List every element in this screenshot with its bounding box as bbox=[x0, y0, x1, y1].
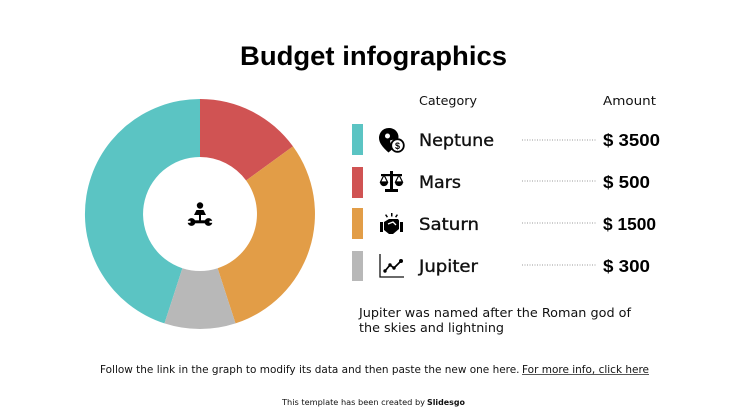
icon: person with wrench bbox=[187, 202, 213, 226]
label: Saturn: Saturn bbox=[419, 215, 479, 234]
swatch: Neptune bbox=[352, 124, 363, 155]
segment: Saturn bbox=[218, 146, 315, 323]
donut chart bbox=[85, 99, 315, 329]
icon: location pin with coin: $ bbox=[395, 141, 400, 151]
segment: Mars bbox=[200, 99, 293, 180]
leader line bbox=[522, 139, 596, 141]
note text: the skies and lightning bbox=[359, 320, 504, 335]
amount: Saturn: $ 1500 bbox=[603, 214, 656, 234]
label: Mars: Mars bbox=[419, 173, 461, 192]
row: Jupiter bbox=[352, 251, 650, 281]
label: Neptune: Neptune bbox=[419, 131, 494, 150]
note text: Jupiter was named after the Roman god of bbox=[358, 305, 632, 320]
icon: handshake bbox=[380, 213, 403, 234]
leader line bbox=[522, 264, 596, 266]
label: Jupiter: Jupiter bbox=[418, 257, 478, 276]
amount: Mars: $ 500 bbox=[603, 172, 650, 192]
amount: Neptune: $ 3500 bbox=[603, 130, 660, 150]
segment: Neptune bbox=[85, 99, 200, 323]
icon: scales bbox=[380, 171, 403, 192]
footer instruction: Follow the link in the graph to modify its data and then paste the new one here. bbox=[100, 363, 520, 376]
column heading: Amount: Amount bbox=[603, 93, 656, 108]
row: Neptune bbox=[352, 124, 660, 155]
segment: Jupiter bbox=[164, 268, 236, 329]
leader line bbox=[522, 222, 596, 224]
amount: Jupiter: $ 300 bbox=[603, 256, 650, 276]
swatch: Saturn bbox=[352, 208, 363, 239]
credit line: This template has been created by bbox=[281, 398, 425, 407]
row: Saturn bbox=[352, 208, 656, 239]
credit line: Slidesgo bbox=[427, 398, 465, 407]
column heading: Category: Category bbox=[419, 93, 478, 108]
swatch: Jupiter bbox=[352, 251, 363, 281]
title: Budget infographics bbox=[240, 41, 507, 71]
row: Mars bbox=[352, 167, 650, 198]
icon: line chart bbox=[380, 254, 404, 277]
leader line bbox=[522, 180, 596, 182]
swatch: Mars bbox=[352, 167, 363, 198]
note text bbox=[358, 305, 632, 335]
footer instruction: For more info, click here bbox=[522, 363, 649, 376]
icon: location pin with coin bbox=[379, 128, 404, 152]
